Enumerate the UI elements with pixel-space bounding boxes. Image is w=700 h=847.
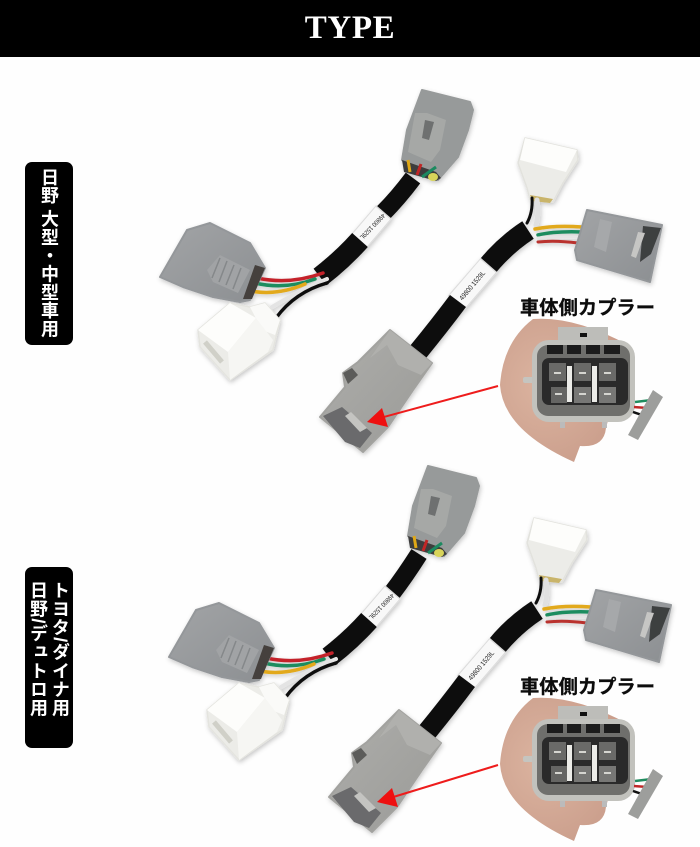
harness B, lower photo — [329, 518, 671, 832]
bottom grey connector — [320, 330, 432, 452]
bottom grey connector — [329, 710, 441, 832]
top grey connector — [408, 466, 479, 557]
title bar: TYPE — [0, 0, 700, 57]
cable and heat-shrink — [329, 554, 419, 657]
small plug and wires — [628, 769, 663, 819]
wires — [527, 198, 582, 243]
white connector — [527, 518, 587, 583]
label pill: Toyota Dyna and Hino Dutro: 日野/デュトロ用 — [28, 581, 48, 718]
right grey connector — [575, 210, 662, 282]
cable label text: 49800 1529L — [459, 270, 487, 302]
harness A, lower photo — [169, 466, 479, 760]
left grey connector — [169, 603, 274, 682]
left grey connector — [160, 223, 265, 302]
white connector — [518, 138, 578, 203]
coupler photo — [523, 706, 635, 807]
right grey connector — [584, 590, 671, 662]
cable and heat-shrink — [320, 178, 413, 277]
coloured wires — [246, 273, 327, 318]
callout lower: vehicle-side coupler — [500, 676, 663, 841]
white connector — [207, 683, 289, 760]
white connector — [198, 303, 280, 380]
cable label text: 49800 1529L — [367, 592, 395, 621]
cable and heat-shrink — [427, 610, 537, 732]
wires — [536, 578, 591, 623]
hand photo — [500, 698, 628, 841]
label pill: Toyota Dyna and Hino Dutro — [25, 567, 73, 748]
coupler photo — [523, 327, 635, 428]
arrow upper: red pointer to coupler end — [367, 386, 498, 427]
label pill: Hino large and medium trucks: 日野 大型・中型車用 — [39, 168, 59, 338]
cable label text: 49800 1529L — [468, 650, 496, 682]
hand photo — [500, 319, 628, 462]
cable and heat-shrink — [418, 230, 528, 352]
cable label text: 49800 1529L — [358, 212, 386, 241]
callout upper: vehicle-side coupler — [500, 297, 663, 462]
label pill: Toyota Dyna and Hino Dutro: トヨタ/ダイナ用 — [50, 581, 70, 718]
callout heading: 車体側カプラー — [520, 297, 655, 319]
coloured wires — [255, 653, 336, 698]
label pill: Hino large and medium trucks — [25, 162, 73, 345]
harness B, upper photo — [320, 138, 662, 452]
small plug and wires — [628, 390, 663, 440]
title bar: TYPE: TYPE — [305, 10, 395, 46]
harness A, upper photo — [160, 90, 473, 380]
top grey connector — [402, 90, 473, 181]
arrow lower: red pointer to coupler end — [377, 765, 498, 807]
callout heading: 車体側カプラー — [520, 676, 655, 698]
